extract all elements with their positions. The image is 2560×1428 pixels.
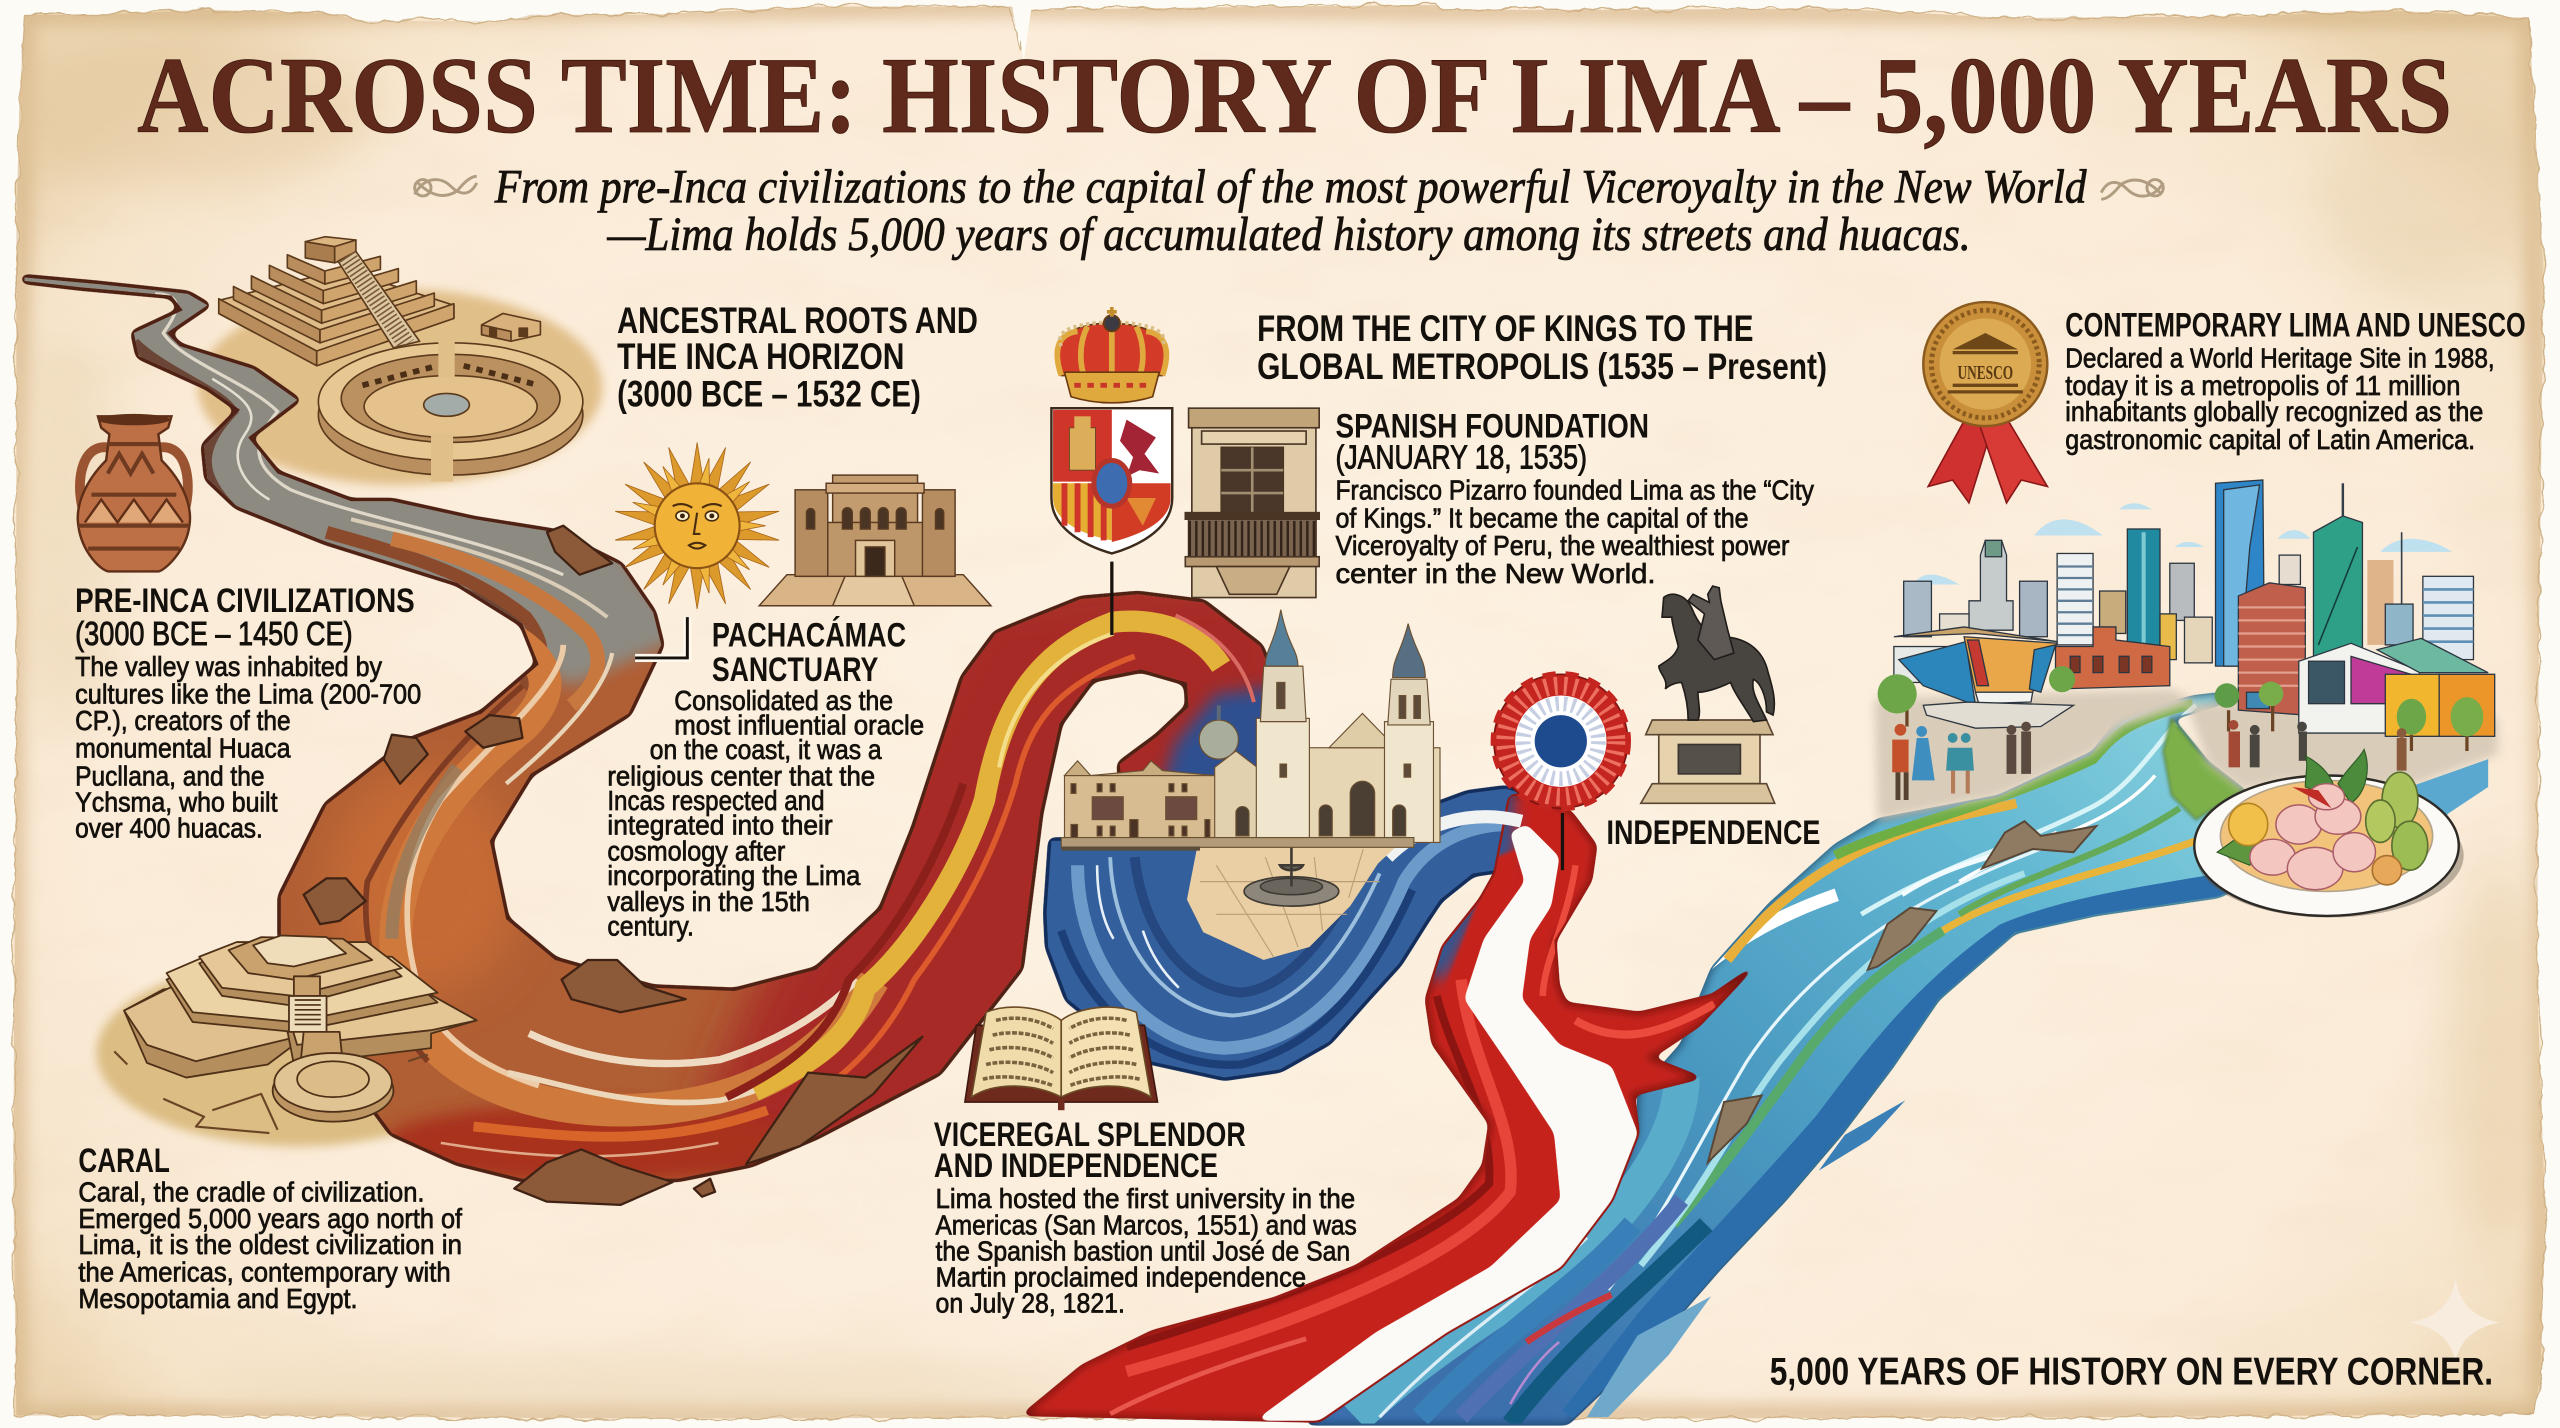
plaza in front of the cathedral xyxy=(1187,826,1407,960)
text block: Pachacámac sanctuary: integrated into their xyxy=(607,809,833,840)
text block: Pachacámac sanctuary: religious center that the xyxy=(607,760,875,791)
icon: open book xyxy=(965,1007,1158,1110)
icon: left flourish xyxy=(415,176,477,196)
text block: Caral: Emerged 5,000 years ago north of xyxy=(78,1203,462,1234)
sand blob: Caral xyxy=(96,960,498,1146)
icon: clay jar xyxy=(78,414,190,571)
text block: Pachacámac sanctuary: cosmology after xyxy=(607,835,785,866)
city ground and plazas xyxy=(1874,689,2498,820)
text block: Pachacámac sanctuary xyxy=(607,615,924,942)
modern buildings xyxy=(2299,638,2495,736)
white flag band xyxy=(1256,824,1638,1420)
text block: contemporary Lima: today it is a metropolis of 11 million xyxy=(2065,370,2460,401)
sand blob: ancient site xyxy=(198,289,602,485)
blue stream behind plate xyxy=(2410,759,2488,833)
text block: Spanish foundation: Viceroyalty of Peru, the wealthiest power xyxy=(1336,530,1789,561)
icon: Pachacámac temple xyxy=(759,475,991,606)
text block: viceregal splendor: the Spanish bastion until José de San xyxy=(936,1235,1350,1266)
text block: Pachacámac sanctuary: Consolidated as the xyxy=(674,685,893,716)
icon: UNESCO medal xyxy=(1923,302,2047,503)
text block: pre-Inca civilizations xyxy=(75,582,421,844)
icon: sun xyxy=(614,442,780,609)
text block: Caral: Caral, the cradle of civilization. xyxy=(78,1177,424,1208)
subtitle xyxy=(494,161,2087,261)
text block: Caral: CARAL xyxy=(78,1142,170,1180)
text block: Spanish foundation: Francisco Pizarro founded Lima as the “City xyxy=(1336,475,1814,506)
icon: Lima cathedral and palace xyxy=(1061,610,1440,851)
stream rocks xyxy=(1708,821,2096,1162)
river spikes: thin blue tails xyxy=(1587,1100,1905,1417)
river rocks: brown section xyxy=(304,526,922,1205)
text block: contemporary Lima xyxy=(2065,306,2526,455)
icon: right flourish xyxy=(2101,180,2163,199)
subtitle: From pre-Inca civilizations to the capital of the most powerful Viceroyalty in the New World xyxy=(494,161,2087,213)
text block: from the City of Kings heading xyxy=(1257,308,1827,387)
text block: pre-Inca civilizations: Ychsma, who built xyxy=(75,786,278,817)
white arc over the blue band xyxy=(1388,817,1522,857)
text block: Pachacámac sanctuary: most influential oracle xyxy=(674,710,924,741)
text block: Pachacámac sanctuary: PACHACÁMAC xyxy=(712,615,906,655)
text block: viceregal splendor: Martin proclaimed independence xyxy=(936,1262,1306,1293)
timeline river: blue section xyxy=(1042,785,1518,1081)
icon: crown xyxy=(1057,307,1167,403)
text block: viceregal splendor: on July 28, 1821. xyxy=(936,1288,1125,1319)
text block: Ancestral roots heading: THE INCA HORIZON xyxy=(617,336,904,377)
text block: viceregal splendor: VICEREGAL SPLENDOR xyxy=(934,1116,1246,1154)
text block: pre-Inca civilizations: (3000 BCE – 1450 CE) xyxy=(75,616,353,653)
text block: Spanish foundation: (JANUARY 18, 1535) xyxy=(1336,440,1587,477)
text block: Ancestral roots heading: ANCESTRAL ROOTS AND xyxy=(617,300,978,341)
text block: viceregal splendor: Americas (San Marcos, 1551) and was xyxy=(936,1209,1357,1240)
text block: from the City of Kings heading: GLOBAL METROPOLIS (1535 – Present) xyxy=(1257,346,1827,387)
text block: Pachacámac sanctuary: on the coast, it was a xyxy=(650,734,882,765)
connector: Pachacámac xyxy=(635,617,687,658)
icon: circular plaza xyxy=(318,335,583,482)
timeline river: multicoloured stream xyxy=(1306,694,2286,1424)
text block: Pachacámac sanctuary: incorporating the Lima xyxy=(607,860,861,891)
text block: Pachacámac sanctuary: century. xyxy=(607,911,694,942)
text block: contemporary Lima: inhabitants globally recognized as the xyxy=(2065,396,2483,427)
text block: viceregal splendor xyxy=(934,1116,1357,1319)
text block: from the City of Kings heading: FROM THE CITY OF KINGS TO THE xyxy=(1257,308,1753,349)
text block: pre-Inca civilizations: over 400 huacas. xyxy=(75,813,263,844)
icon: equestrian statue xyxy=(1641,586,1775,803)
text block: pre-Inca civilizations: PRE-INCA CIVILIZATIONS xyxy=(75,582,415,620)
trees xyxy=(1878,666,2483,751)
icon: royal shield xyxy=(1051,408,1172,553)
text block: pre-Inca civilizations: Pucllana, and the xyxy=(75,760,264,791)
text block: Caral: Lima, it is the oldest civilization in xyxy=(78,1229,462,1260)
icon: independence rosette xyxy=(1494,674,1628,808)
text block: Pachacámac sanctuary: Incas respected and xyxy=(607,785,824,816)
text block: Caral: the Americas, contemporary with xyxy=(78,1257,451,1288)
people xyxy=(1892,720,2407,800)
text block: pre-Inca civilizations: CP.), creators of the xyxy=(75,705,291,736)
connector: rosette to river xyxy=(1561,813,1563,870)
text block: Spanish foundation: center in the New World. xyxy=(1336,558,1656,589)
text block: Ancestral roots heading xyxy=(617,300,978,415)
text block: Ancestral roots heading: (3000 BCE – 1532 CE) xyxy=(617,374,921,415)
city skyline xyxy=(1894,480,2473,728)
label: independence: INDEPENDENCE xyxy=(1607,814,1820,852)
text block: Pachacámac sanctuary: SANCTUARY xyxy=(712,651,878,689)
icon: ceviche plate xyxy=(2194,749,2464,918)
text block: Spanish foundation xyxy=(1336,408,1814,589)
text block: Spanish foundation: SPANISH FOUNDATION xyxy=(1336,408,1649,446)
text block: viceregal splendor: Lima hosted the first university in the xyxy=(936,1183,1355,1214)
timeline river: brown and red section xyxy=(22,274,1267,1182)
text block: Spanish foundation: of Kings.” It became the capital of the xyxy=(1336,502,1749,533)
timeline river: red and white flag section xyxy=(1025,767,1750,1420)
icon: corner sparkle xyxy=(2410,1278,2500,1362)
icon: UNESCO medal: UNESCO xyxy=(1958,363,2013,384)
text block: pre-Inca civilizations: cultures like the Lima (200-700 xyxy=(75,679,421,710)
text block: Pachacámac sanctuary: valleys in the 15th xyxy=(607,886,810,917)
text block: pre-Inca civilizations: monumental Huaca xyxy=(75,733,291,764)
text block: contemporary Lima: Declared a World Heritage Site in 1988, xyxy=(2065,342,2495,373)
text block: contemporary Lima: gastronomic capital of Latin America. xyxy=(2065,424,2475,455)
text block: viceregal splendor: AND INDEPENDENCE xyxy=(934,1147,1218,1185)
text block: pre-Inca civilizations: The valley was inhabited by xyxy=(75,651,382,682)
text block: Caral xyxy=(78,1142,462,1314)
icon: stepped pyramid xyxy=(219,237,540,366)
text block: Caral: Mesopotamia and Egypt. xyxy=(78,1283,358,1314)
subtitle: —Lima holds 5,000 years of accumulated history among its streets and huacas. xyxy=(606,209,1971,261)
icon: Caral pyramid xyxy=(114,936,477,1133)
icon: colonial balcony xyxy=(1185,408,1319,598)
connector: shield to river xyxy=(1111,562,1113,635)
